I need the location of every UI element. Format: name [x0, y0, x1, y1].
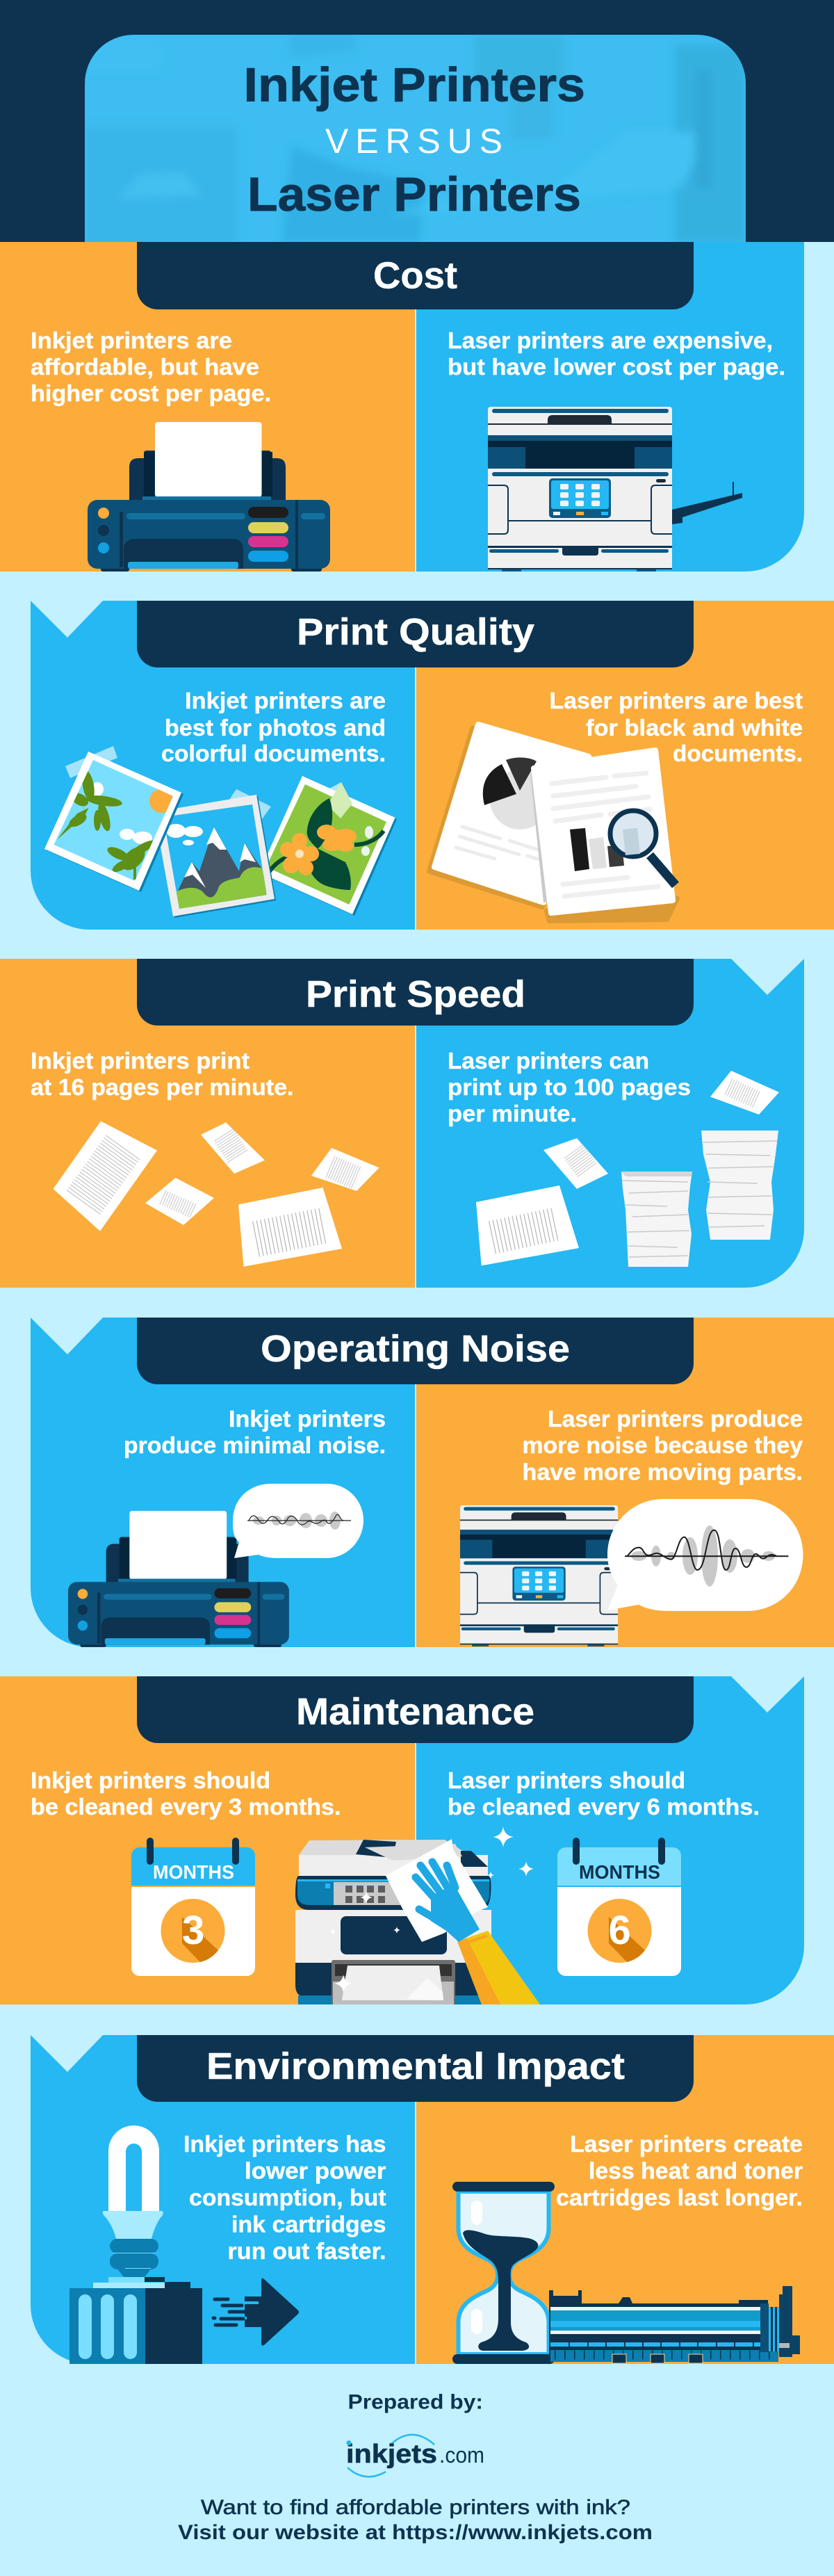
text: inkjet cost: affordable, but have — [31, 354, 259, 380]
panel: maintenance — [0, 1676, 804, 2004]
panel: environmental impact — [31, 2035, 834, 2364]
heading: maintenance — [137, 1676, 694, 1743]
text: inkjet quality: best for photos and — [165, 715, 386, 740]
icon: hourglass — [452, 2182, 555, 2364]
text: inkjet cost — [31, 327, 271, 406]
icon: calendar 3 months — [131, 1838, 255, 1976]
icon: arrow — [213, 2278, 299, 2346]
panel: operating noise — [31, 1318, 834, 1647]
text: laser speed: print up to 100 pages — [448, 1074, 691, 1100]
text: inkjet maintenance: Inkjet printers should — [31, 1767, 270, 1793]
icon: light bulb on battery — [70, 2125, 202, 2364]
text: inkjet speed — [31, 1048, 293, 1100]
heading: print quality: Print Quality — [297, 611, 534, 653]
icon: inkjet printer with sound bubble — [68, 1484, 363, 1647]
photo: mountains — [154, 789, 276, 918]
text: laser noise: Laser printers produce — [548, 1406, 803, 1432]
text: inkjet quality — [161, 688, 386, 766]
text: laser cost: but have lower cost per page. — [448, 354, 785, 380]
text: prepared by: Prepared by: — [348, 2390, 483, 2414]
text: laser environmental: cartridges last longer. — [556, 2185, 803, 2210]
text: inkjet environmental: consumption, but — [189, 2185, 386, 2210]
text: laser maintenance: Laser printers should — [448, 1767, 685, 1793]
icon: flying pages and stacks — [476, 1071, 779, 1267]
text: call to action question: Want to find affordable printers with ink? — [201, 2496, 630, 2519]
text: inkjet quality: colorful documents. — [161, 740, 386, 766]
title: VERSUS: VERSUS — [325, 122, 502, 161]
header photo panel — [85, 35, 746, 245]
icon: scattered pages — [53, 1121, 379, 1267]
panel: cost — [0, 242, 804, 572]
icon: printer being cleaned — [295, 1826, 540, 2004]
heading: cost — [137, 242, 694, 309]
text: inkjet maintenance — [31, 1767, 341, 1820]
text: inkjet noise — [124, 1406, 386, 1458]
text: inkjet cost: higher cost per page. — [31, 380, 271, 406]
text: inkjet maintenance: be cleaned every 3 months. — [31, 1794, 341, 1820]
text: inkjet environmental — [183, 2131, 386, 2264]
text: laser speed: Laser printers can — [448, 1048, 649, 1074]
heading: print speed: Print Speed — [306, 973, 525, 1015]
text: laser maintenance: be cleaned every 6 months. — [448, 1794, 760, 1820]
text: laser noise: more noise because they — [523, 1432, 803, 1458]
header band — [0, 0, 834, 245]
text: inkjet quality: Inkjet printers are — [185, 688, 386, 713]
text: laser environmental: less heat and toner — [589, 2158, 803, 2183]
logo: inkjets.com: inkjets — [346, 2440, 437, 2469]
heading: operating noise — [137, 1318, 694, 1384]
icon: photographs — [44, 746, 397, 918]
text: laser speed — [448, 1048, 691, 1126]
title: Laser Printers: Laser Printers — [247, 168, 581, 221]
text: inkjet noise: Inkjet printers — [229, 1406, 386, 1432]
icon: calendar 6 months: MONTHS — [579, 1861, 660, 1883]
heading: environmental impact: Environmental Impact — [206, 2046, 625, 2087]
text: inkjet environmental: lower power — [245, 2158, 386, 2183]
title: Inkjet Printers: Inkjet Printers — [243, 58, 585, 111]
icon: toner cartridge — [549, 2286, 800, 2363]
text: laser environmental: Laser printers create — [570, 2131, 803, 2157]
icon: calendar 3 months: MONTHS — [153, 1861, 234, 1883]
text: inkjet cost: Inkjet printers are — [31, 327, 232, 353]
heading: print speed — [137, 959, 694, 1026]
text: laser cost — [448, 327, 785, 380]
photo: flower — [259, 776, 397, 916]
text: laser maintenance — [448, 1767, 760, 1820]
heading: environmental impact — [137, 2035, 694, 2102]
text: inkjet noise: produce minimal noise. — [124, 1432, 386, 1458]
text: laser noise: have more moving parts. — [523, 1459, 803, 1485]
text: laser quality: documents. — [673, 740, 803, 766]
heading: maintenance: Maintenance — [296, 1691, 534, 1733]
heading: operating noise: Operating Noise — [261, 1328, 570, 1370]
panel: print quality — [31, 601, 834, 930]
text: laser noise — [523, 1406, 803, 1485]
icon: calendar 6 months — [557, 1838, 681, 1976]
icon: calendar 6 months: 6 — [609, 1908, 631, 1953]
text: inkjet speed: at 16 pages per minute. — [31, 1074, 293, 1100]
heading: cost: Cost — [373, 254, 457, 296]
photo: palm trees — [44, 746, 183, 892]
text: inkjet speed: Inkjet printers print — [31, 1048, 250, 1074]
text: laser environmental — [556, 2131, 803, 2210]
text: inkjet environmental: ink cartridges — [231, 2211, 386, 2237]
icon: documents with magnifier — [430, 724, 678, 921]
text: inkjet environmental: run out faster. — [228, 2238, 386, 2264]
text: laser quality — [549, 688, 803, 766]
logo: inkjets.com: .com — [439, 2443, 484, 2468]
text: laser speed: per minute. — [448, 1101, 577, 1126]
icon: laser printer with sound bubble — [460, 1499, 803, 1646]
logo: inkjets.com — [346, 2435, 484, 2477]
text: website: Visit our website at https://www.inkjets.com — [178, 2521, 653, 2544]
text: laser cost: Laser printers are expensive, — [448, 327, 773, 353]
text: inkjet environmental: Inkjet printers has — [183, 2131, 386, 2157]
panel: print speed — [0, 959, 804, 1288]
icon: calendar 3 months: 3 — [182, 1908, 204, 1953]
icon: laser printer with tray — [488, 407, 742, 572]
text: laser quality: for black and white — [586, 715, 803, 740]
text: laser quality: Laser printers are best — [549, 688, 803, 713]
icon: inkjet printer — [88, 422, 330, 572]
heading: print quality — [137, 601, 694, 667]
